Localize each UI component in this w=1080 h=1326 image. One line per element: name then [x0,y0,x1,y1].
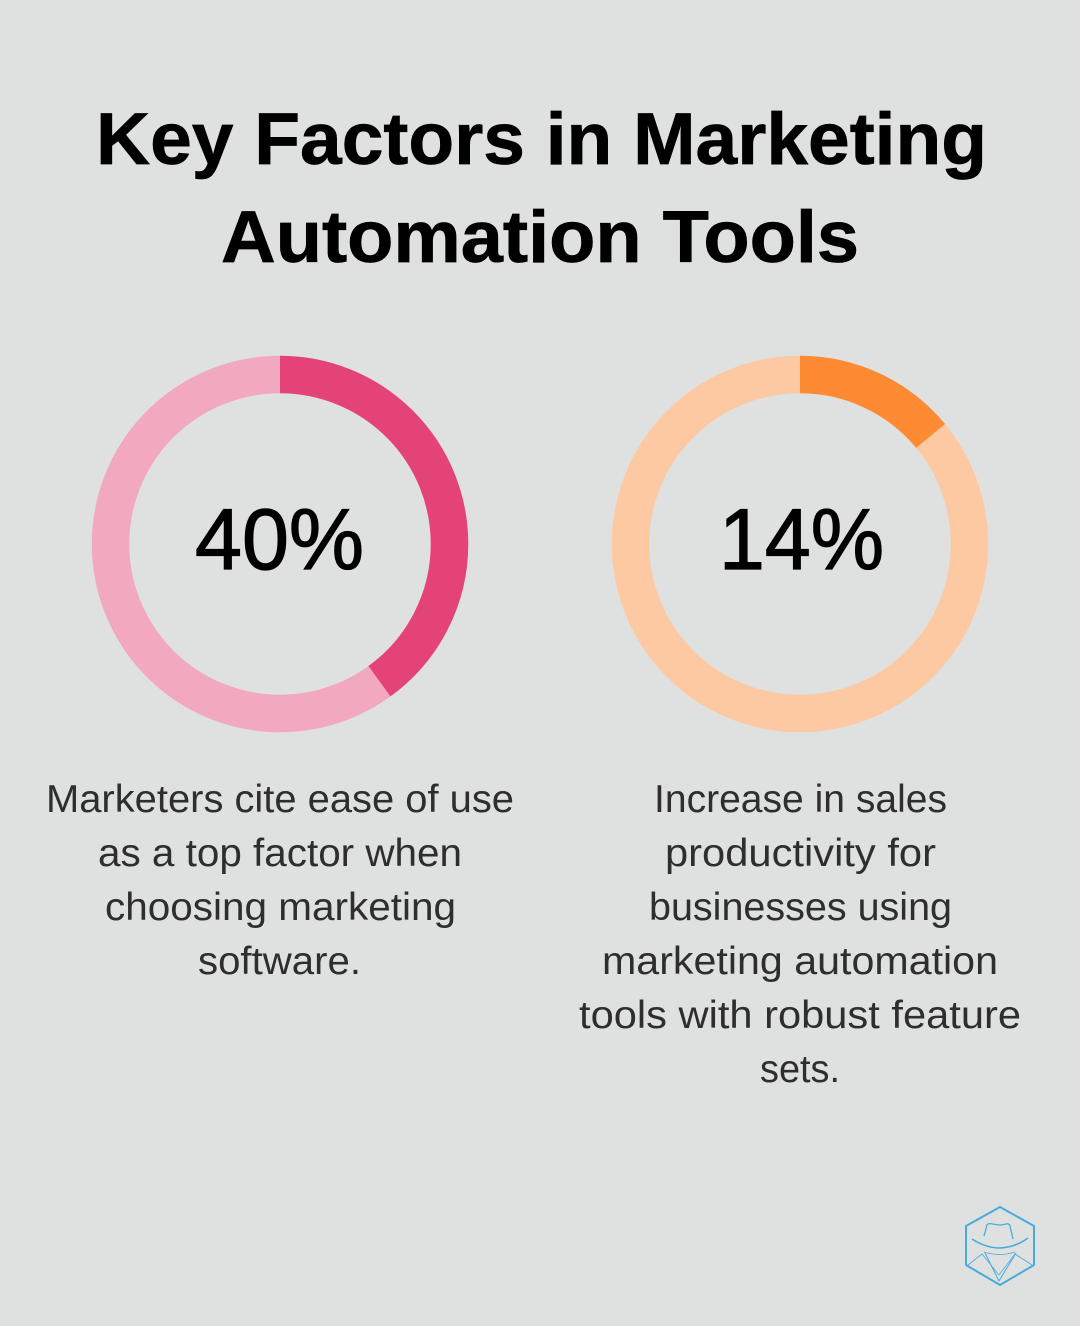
title [96,99,987,278]
panel: ease of use statistic [46,374,514,983]
panel: sales productivity statistic [579,374,1021,1091]
description: sales productivity: productivity for [665,832,936,875]
donut chart: 14% [630,374,970,714]
description: sales productivity: tools with robust feature [579,994,1021,1037]
value: 40%: 40% [195,492,364,588]
description: sales productivity: marketing automation [602,940,998,983]
title: Key Factors in Marketing [96,99,987,180]
value: 14%: 14% [719,492,884,588]
description: ease of use: Marketers cite ease of use [46,778,514,821]
title: Automation Tools [221,197,859,278]
description: sales productivity: businesses using [649,886,952,929]
description: ease of use: choosing marketing [105,886,456,929]
description: sales productivity [579,778,1021,1091]
description: sales productivity: sets. [760,1048,840,1091]
icon: hexagon logo with hat and collar [966,1207,1034,1285]
donut chart: 40% [110,374,450,714]
description: ease of use: software. [198,940,361,983]
description: ease of use [46,778,514,983]
description: ease of use: as a top factor when [98,832,462,875]
description: sales productivity: Increase in sales [654,778,947,821]
